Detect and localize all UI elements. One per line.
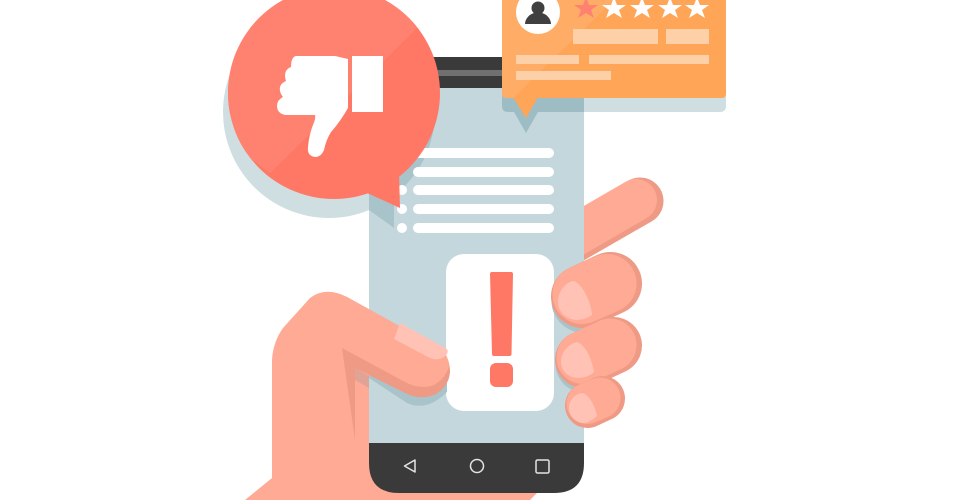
hand: palm behind phone (245, 292, 560, 500)
finger: little (569, 393, 602, 423)
phone (369, 57, 584, 493)
phone bottom bar (369, 443, 584, 493)
star rating (574, 0, 709, 18)
review card (502, 0, 726, 118)
icon: home button (470, 460, 484, 472)
icon: thumbs down (277, 56, 383, 157)
text lines on screen (397, 148, 554, 233)
icon: back button (404, 460, 415, 472)
finger: middle (558, 281, 610, 320)
finger: ring (561, 342, 614, 378)
phone screen (369, 88, 584, 443)
thumb base shading (355, 368, 369, 388)
bubble shadow (223, 76, 434, 228)
thumb shape (300, 295, 450, 440)
review text lines (516, 29, 709, 80)
avatar (516, 0, 560, 34)
thumb (290, 295, 450, 440)
finger shadows on screen (583, 288, 614, 364)
alert card (446, 254, 554, 411)
speaker (420, 70, 510, 76)
card shadow (502, 80, 726, 133)
icon: recent apps button (536, 460, 549, 473)
fingernail (558, 281, 592, 320)
illustration: hand holding phone with negative review (223, 0, 726, 500)
thumb shadow on screen (369, 370, 447, 406)
speech bubble: thumbs down (228, 0, 440, 208)
fingernail (569, 393, 597, 423)
phone top bar (369, 57, 584, 88)
finger: index behind phone (559, 200, 640, 247)
icon: exclamation mark (490, 272, 513, 387)
thumbnail (394, 323, 448, 359)
fingernail (561, 342, 594, 378)
